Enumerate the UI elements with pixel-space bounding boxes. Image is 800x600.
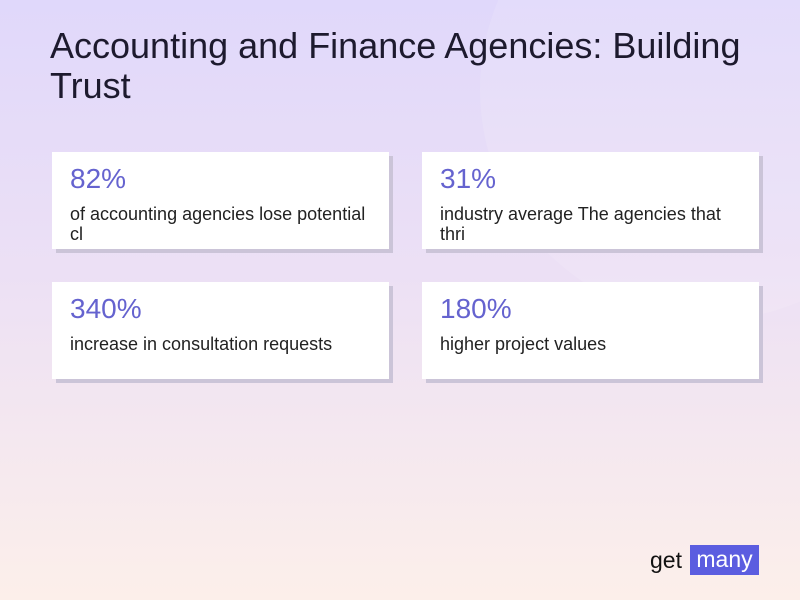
card: 31%: 31% <box>440 163 496 194</box>
title: Accounting and Finance Agencies: Building Trust <box>50 25 740 106</box>
card: 180%: 180% <box>440 293 512 324</box>
card: 340% <box>52 282 389 379</box>
text: many <box>696 546 753 572</box>
card: 82%: 82% <box>70 163 126 194</box>
card: 31% <box>422 152 759 249</box>
card: 82% <box>52 152 389 249</box>
card: 82%: of accounting agencies lose potential cl <box>70 204 365 244</box>
card: 180%: higher project values <box>440 334 606 354</box>
logo <box>650 545 759 575</box>
text: get <box>650 547 682 573</box>
card: 31%: industry average The agencies that thri <box>440 204 721 244</box>
card: 340%: 340% <box>70 293 142 324</box>
card: 340%: increase in consultation requests <box>70 334 332 354</box>
card: 180% <box>422 282 759 379</box>
